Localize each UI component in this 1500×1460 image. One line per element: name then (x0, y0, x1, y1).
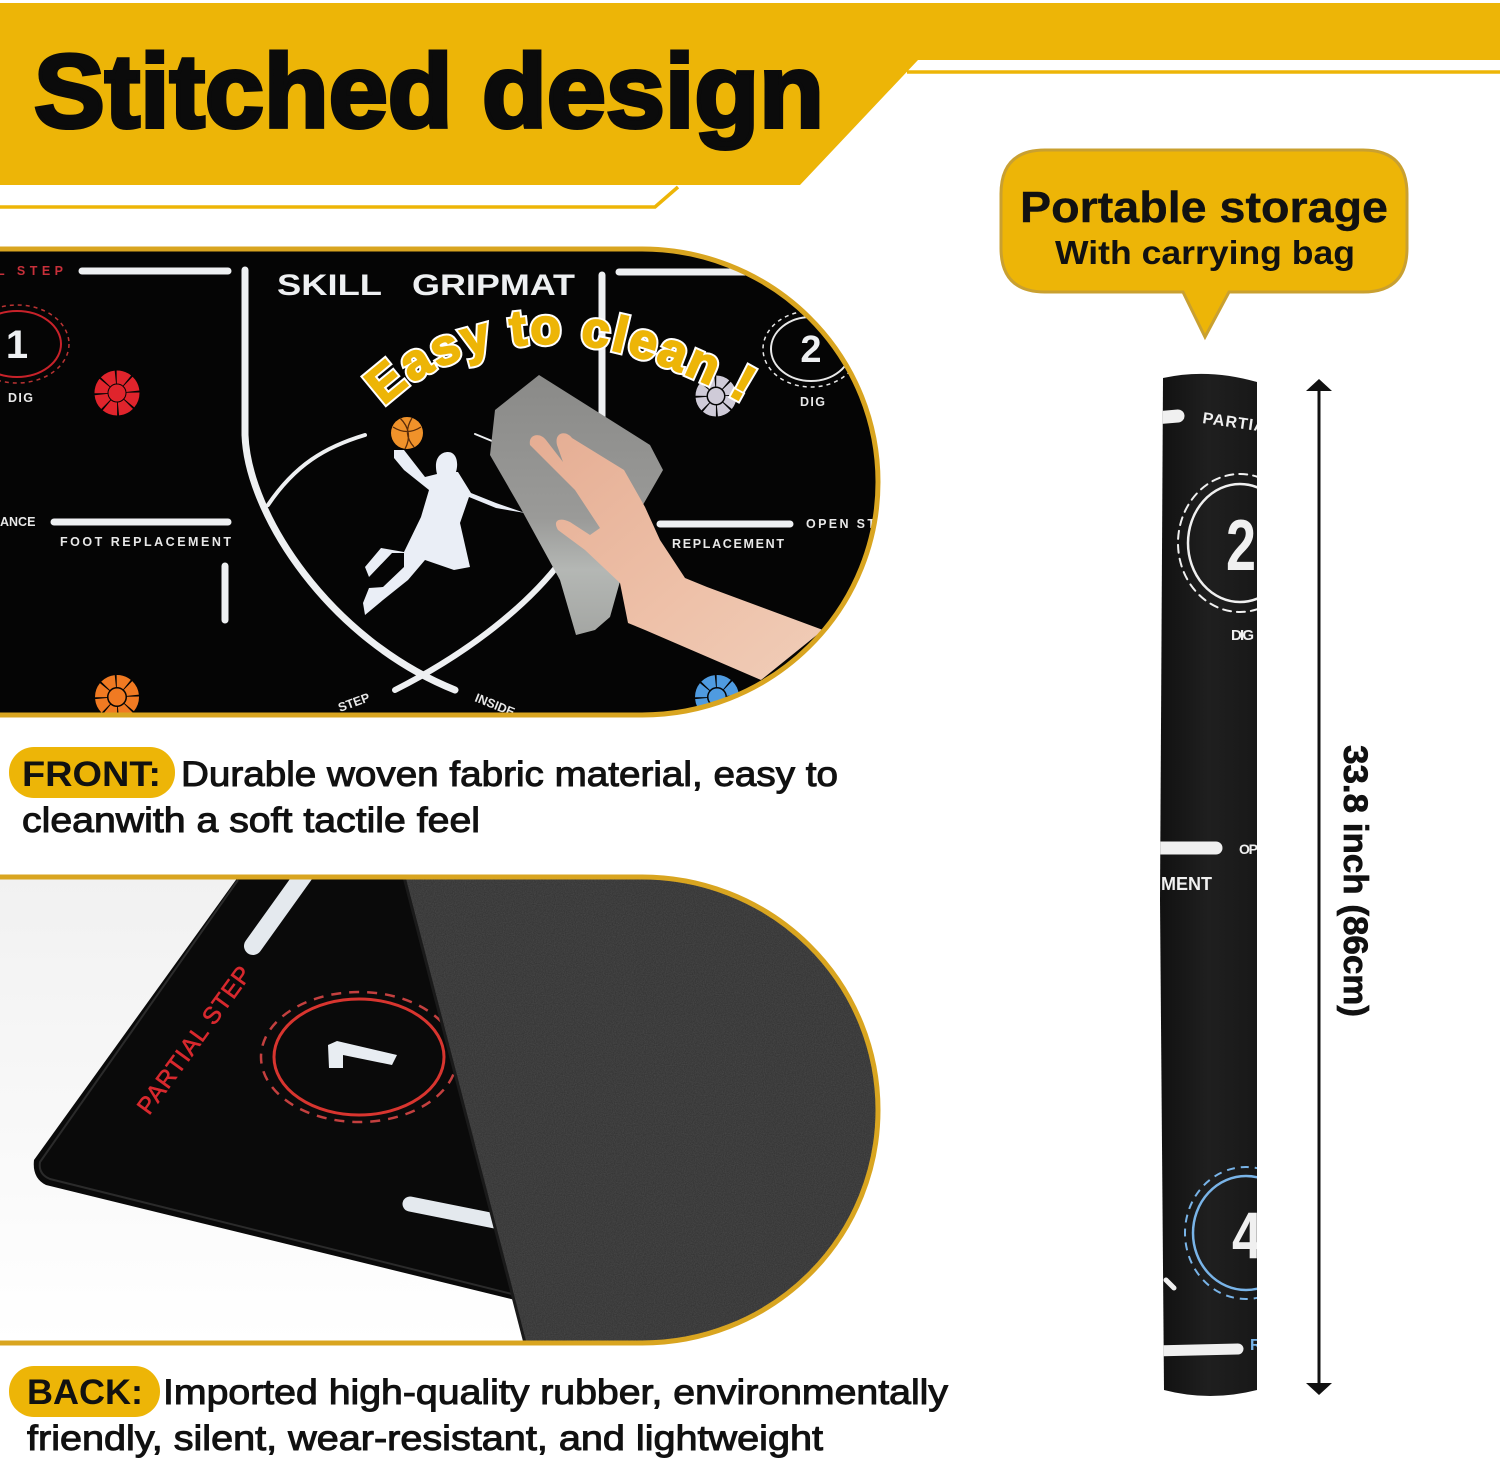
step 2 marker (763, 311, 859, 387)
back text: Imported high-quality rubber, environmentally (163, 1373, 949, 1412)
tube labels: 4 (1232, 1198, 1262, 1272)
title: Stitched design (34, 34, 824, 150)
tube labels: 2 (1226, 506, 1256, 586)
front label pill (9, 747, 175, 798)
heading: easy to clean: Easy to clean ! (360, 309, 759, 408)
panel: back of mat (0, 872, 900, 1343)
court lines (54, 270, 790, 690)
rolled mat tube (1160, 374, 1257, 1396)
step 2 marker: 2 (800, 329, 822, 371)
tube labels (1162, 412, 1257, 1350)
callout: portable storage (1001, 150, 1407, 337)
dimension arrow (1306, 379, 1332, 1395)
front description: cleanwith a soft tactile feel (22, 801, 480, 840)
mat labels: REPLACEMENT (672, 537, 784, 551)
mat labels: INSIDE (473, 691, 517, 719)
callout: portable storage: With carrying bag (1055, 234, 1355, 271)
mat labels (0, 264, 875, 719)
step 1 marker (0, 305, 69, 383)
step 1 marker: 1 (6, 323, 28, 367)
dimension label: 33.8 inch (86cm) (1336, 745, 1374, 1017)
tube labels: DIG (1231, 627, 1254, 644)
back description: friendly, silent, wear-resistant, and lightweight (27, 1419, 823, 1458)
back label pill (9, 1366, 160, 1417)
mat title: SKILL (277, 269, 382, 302)
tube labels: PARTIAL (1201, 410, 1278, 437)
front description: FRONT: (22, 755, 161, 794)
mat labels: DIG (8, 391, 33, 405)
back description: BACK: (27, 1373, 143, 1412)
front text: Durable woven fabric material, easy to (181, 755, 838, 794)
step 4 circle (1184, 1166, 1257, 1300)
mat title (278, 274, 575, 296)
tube markings (1160, 410, 1257, 1356)
tube labels: OPEN (1239, 841, 1275, 857)
front description (9, 747, 838, 840)
mat title: GRIPMAT (412, 269, 575, 302)
folded mat front (34, 872, 515, 1300)
mat labels: STEP (336, 690, 372, 715)
basketball (391, 417, 423, 449)
header banner (0, 3, 1500, 207)
white stripes (253, 872, 306, 946)
panel: front of mat (0, 246, 880, 718)
back description (9, 1366, 949, 1458)
mat labels: DIG (800, 395, 825, 409)
back rubber sheet (400, 877, 900, 1343)
mat labels: ANCE (0, 515, 35, 529)
tube labels: R (1250, 1337, 1262, 1354)
cloth (490, 375, 663, 635)
step 1 circle (261, 992, 457, 1122)
mat labels: OPEN ST (806, 517, 875, 531)
mat labels: FOOT REPLACEMENT (60, 535, 231, 549)
callout: portable storage: Portable storage (1020, 183, 1388, 232)
tube labels: MENT (1161, 874, 1212, 894)
player silhouette (363, 450, 525, 615)
hand (530, 433, 823, 680)
heading: easy to clean: Easy to clean ! (362, 312, 756, 405)
partial step label: PARTIAL STEP (132, 961, 257, 1120)
target chips (101, 377, 733, 713)
